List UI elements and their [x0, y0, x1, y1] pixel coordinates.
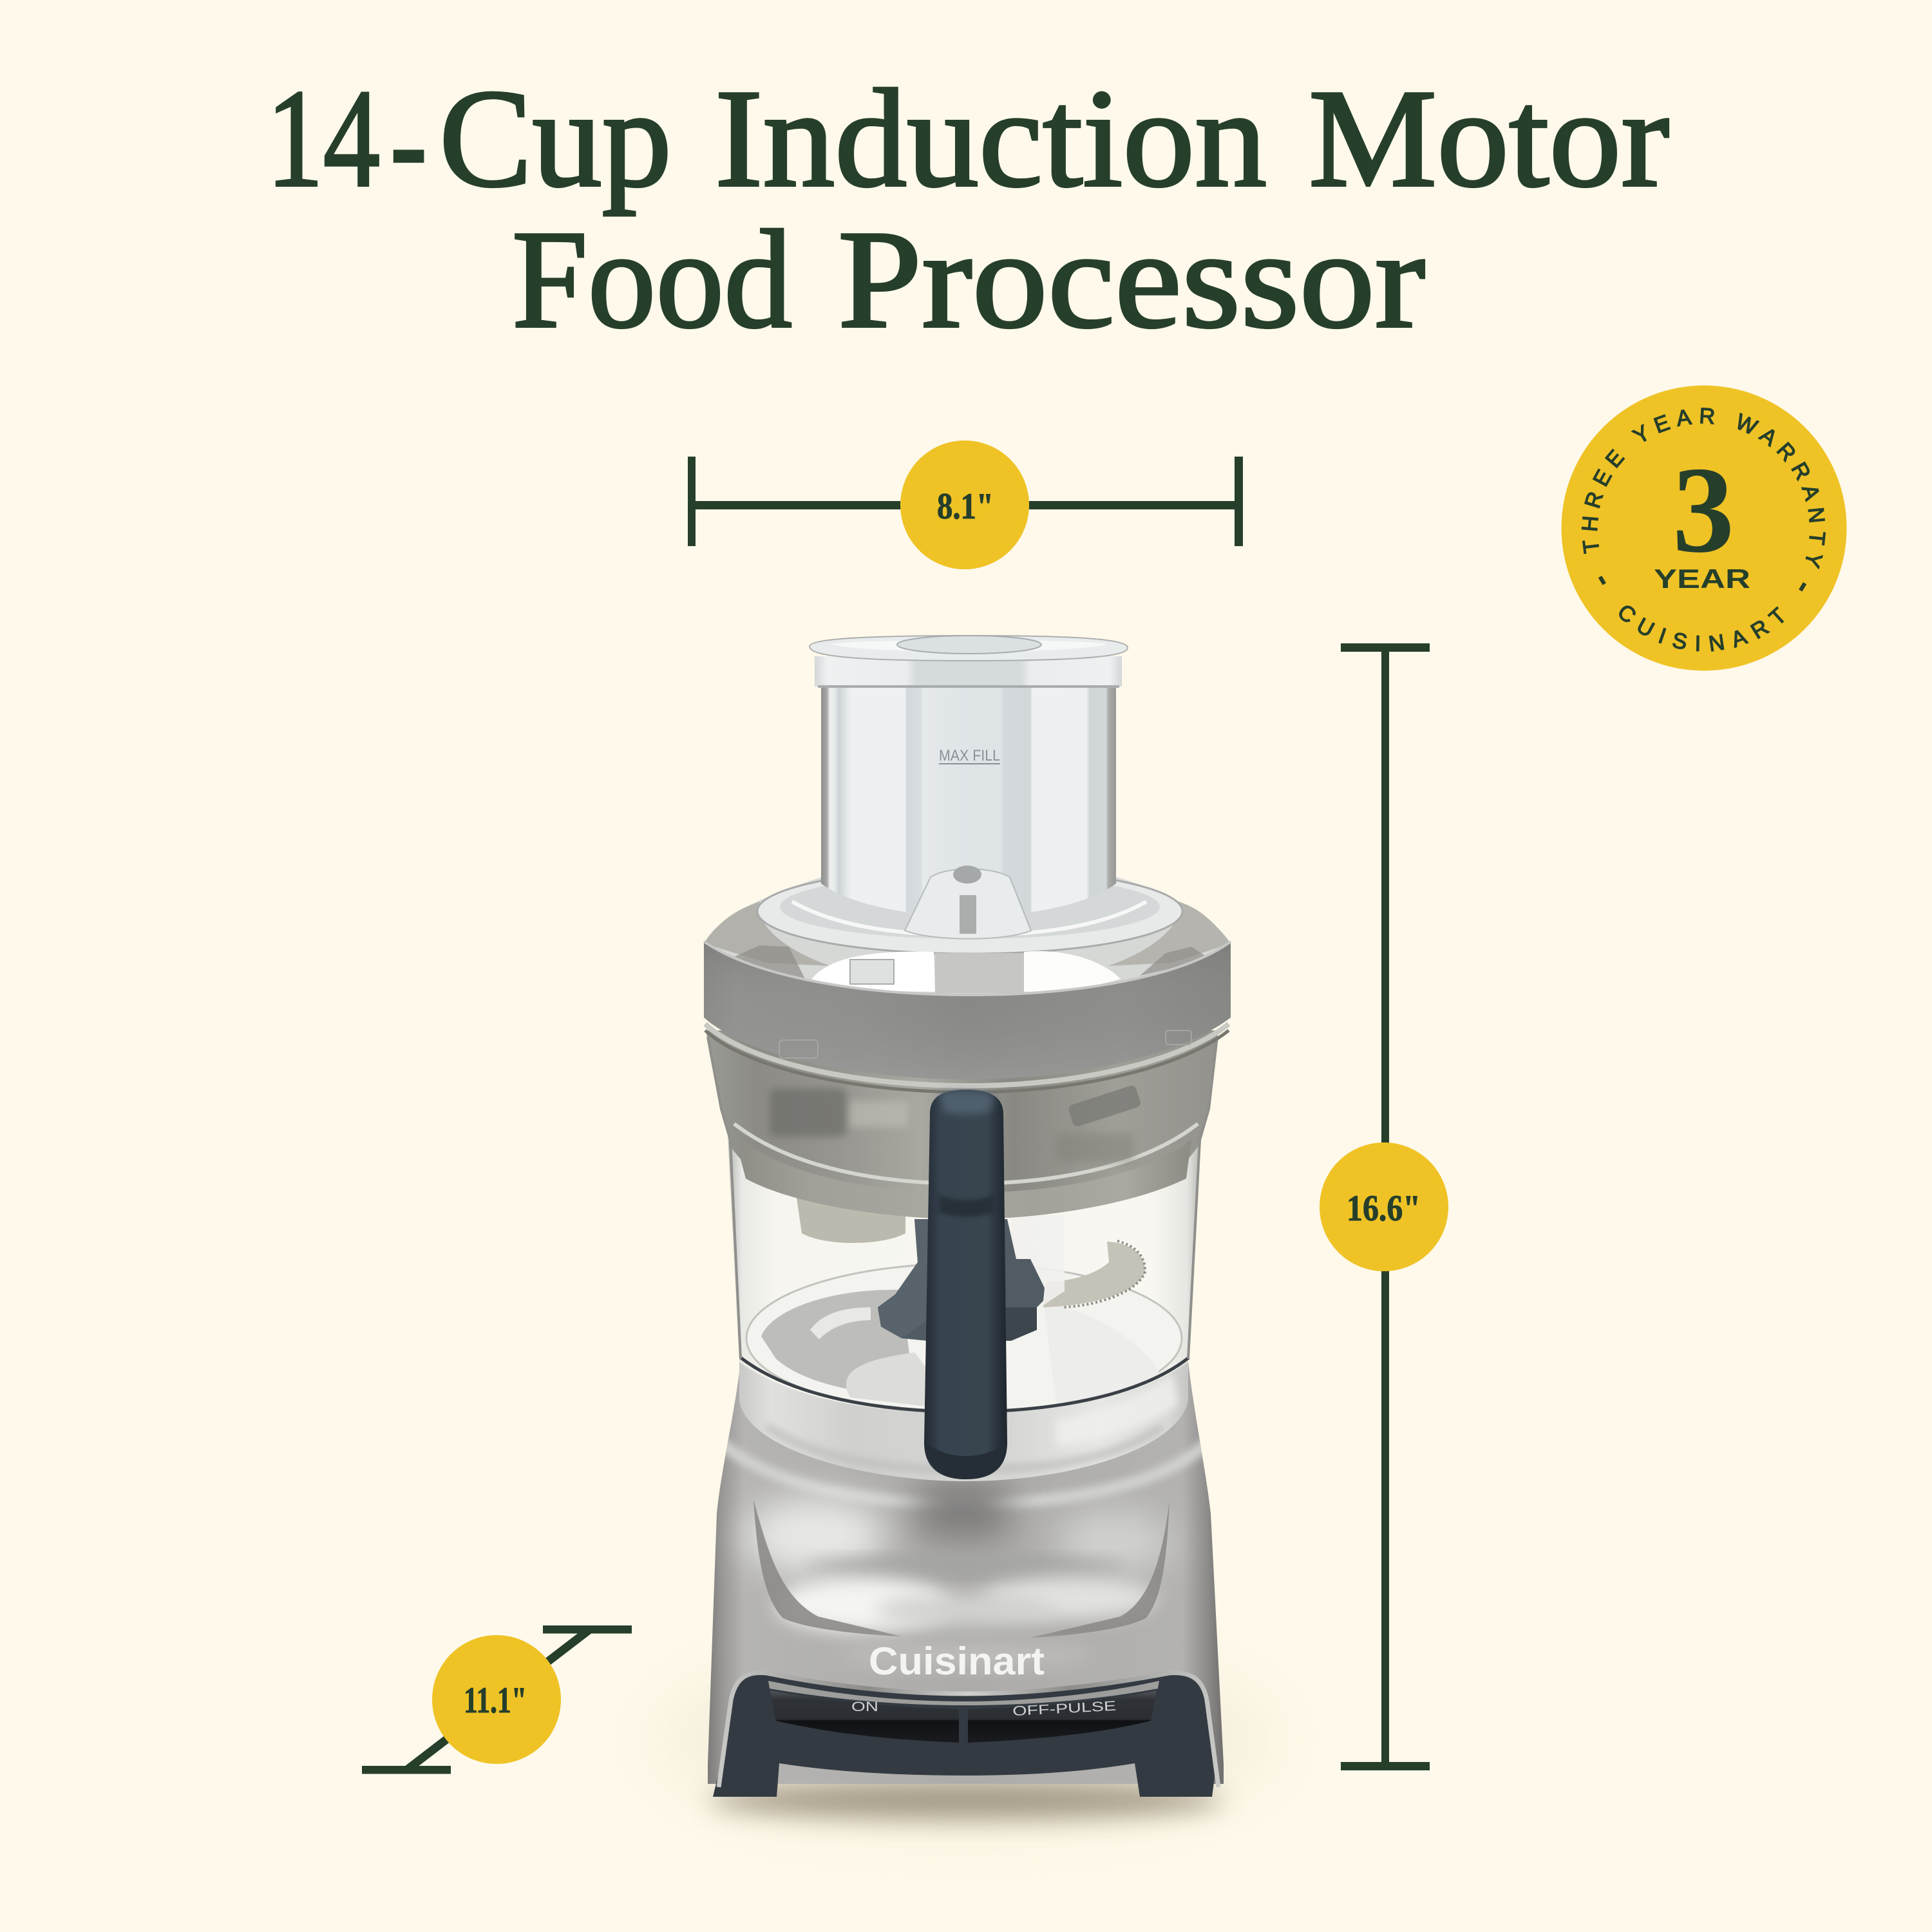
grey lid band	[704, 942, 1231, 1092]
title: Induction	[715, 61, 1267, 216]
control panel housing	[713, 1672, 1218, 1797]
title: Food	[512, 202, 792, 357]
title: Processor	[838, 202, 1425, 357]
on button: ON	[851, 1700, 878, 1714]
bowl floor discs	[746, 1264, 1182, 1413]
title: Motor	[1309, 61, 1669, 216]
height dimension: 16.6 inches	[1320, 643, 1448, 1770]
food processor product illustration	[657, 636, 1275, 1826]
motor base	[708, 1362, 1224, 1784]
on button	[770, 1690, 959, 1743]
bowl handle	[924, 1090, 1007, 1479]
title: -	[390, 65, 427, 220]
off-pulse button	[968, 1690, 1157, 1743]
floor shadow	[657, 1652, 1275, 1826]
max fill marking: MAX FILL	[939, 747, 1000, 764]
feed tube	[810, 636, 1128, 902]
warranty badge: THREE YEAR WARRANTY	[1582, 407, 1826, 569]
warranty badge: YEAR	[1654, 564, 1750, 594]
warranty badge: -	[1586, 565, 1623, 594]
title: 14	[267, 61, 380, 216]
bowl bottom dark ring	[741, 1358, 1189, 1412]
warranty badge: 3	[1672, 441, 1734, 578]
depth dimension: 11.1 inches: 11.1"	[464, 1680, 527, 1721]
title: Cup	[439, 61, 672, 216]
bowl lower translucent skirt	[739, 1362, 1188, 1481]
bowl body	[728, 1133, 1201, 1414]
lid	[704, 837, 1231, 998]
lower basket cup	[797, 1198, 905, 1243]
depth dimension: 11.1 inches	[362, 1625, 632, 1774]
warranty badge: CUISINART	[1619, 605, 1784, 652]
cuisinart logo: Cuisinart	[869, 1640, 1045, 1683]
blade and drive hub	[878, 1215, 1145, 1341]
width dimension: 8.1 inches	[688, 440, 1243, 569]
height dimension: 16.6 inches: 16.6"	[1347, 1188, 1421, 1229]
bowl side highlights	[708, 1037, 1217, 1359]
warranty badge: -	[1782, 571, 1819, 600]
title	[267, 61, 1669, 357]
grey basket inside bowl	[706, 1030, 1218, 1219]
warranty badge	[1561, 385, 1847, 671]
off-pulse button: OFF-PULSE	[1012, 1699, 1117, 1719]
width dimension: 8.1 inches: 8.1"	[937, 486, 994, 527]
